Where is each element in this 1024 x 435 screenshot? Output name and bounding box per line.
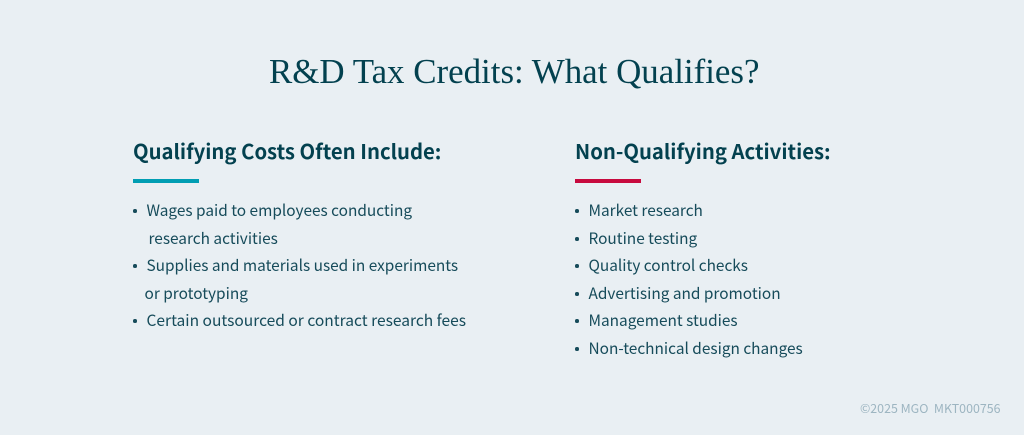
- list: non-qualifying activities: Quality control checks: [588, 254, 748, 276]
- list: qualifying costs: or prototyping: [144, 282, 248, 304]
- list: non-qualifying activities: Non-technical design changes: [588, 337, 803, 359]
- panel: non-qualifying activities: [575, 135, 831, 359]
- list: qualifying costs: Wages paid to employees conducting: [146, 199, 412, 221]
- list: qualifying costs: Supplies and materials used in experiments: [146, 254, 458, 276]
- list: non-qualifying activities: Market research: [588, 199, 703, 221]
- accent bar: teal: [133, 179, 199, 183]
- title: R&D Tax Credits: What Qualifies?: [269, 52, 759, 91]
- panel: qualifying costs: [133, 135, 466, 331]
- heading: qualifying costs: Qualifying Costs Often Include:: [133, 135, 441, 165]
- list: non-qualifying activities: Advertising and promotion: [588, 282, 781, 304]
- list: qualifying costs: research activities: [148, 227, 278, 249]
- heading: non-qualifying activities: Non-Qualifying Activities:: [575, 135, 831, 165]
- list: qualifying costs: Certain outsourced or contract research fees: [146, 309, 466, 331]
- list: non-qualifying activities: Routine testing: [588, 227, 697, 249]
- accent bar: red: [575, 179, 641, 183]
- list: non-qualifying activities: [575, 199, 803, 359]
- footer credit: ©2025 MGO MKT000756: [860, 399, 1000, 417]
- list: qualifying costs: [133, 199, 466, 331]
- list: non-qualifying activities: Management studies: [588, 309, 738, 331]
